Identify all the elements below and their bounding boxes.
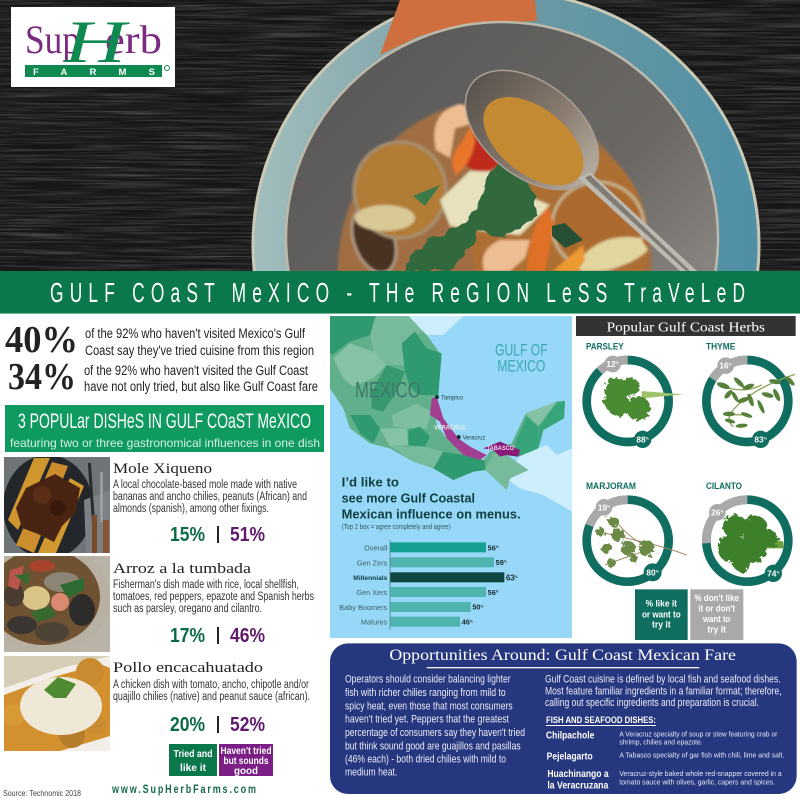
stat: 40%	[5, 319, 314, 361]
logo: SupHerb Farms: erb	[105, 17, 162, 62]
legend: haven't tried but sounds good: but sounds	[224, 756, 269, 767]
chart heading: see more Gulf Coastal	[342, 491, 475, 506]
text: operators recommendation: percentage of consumers say they haven't tried	[345, 727, 525, 739]
dish: Mole Xiqueno: almonds (spanish), among other fixings.	[113, 503, 269, 515]
text: cuisine definition	[545, 673, 782, 709]
fish and seafood dishes list: Pejelagarto	[547, 751, 593, 762]
photo: arroz a la tumbada	[4, 556, 110, 652]
legend: haven't tried but sounds good: good	[234, 766, 258, 777]
donut: parsley: %	[646, 436, 650, 440]
logo: SupHerb Farms: Sup	[25, 17, 80, 62]
legend: like it or want to try it: or want to	[642, 609, 681, 619]
logo: SupHerb Farms: H	[63, 9, 131, 75]
hero photo: seafood soup on dark slate	[0, 0, 800, 271]
stat: 40%: Coast say they've tried cuisine from this region	[85, 343, 314, 358]
donut: cilantro: 26	[711, 507, 720, 517]
bar chart: agreement by generation: Gen Xers	[356, 588, 388, 597]
bar chart: agreement by generation: Matures	[361, 618, 388, 627]
chart heading: (Top 2 box = agree completely and agree)	[342, 524, 451, 531]
map label: Gulf of Mexico: MEXICO	[497, 357, 545, 376]
logo: SupHerb Farms: FARMS	[33, 67, 155, 78]
stat: 34%: of the 92% who haven't visited the Gulf Coast	[84, 363, 308, 378]
herbs heading: Popular Gulf Coast Herbs	[607, 320, 765, 335]
dish: Mole Xiqueno: 15%	[170, 523, 205, 546]
map: land outside Mexico	[407, 316, 572, 512]
dish: Arroz a la tumbada: tomatoes, red peppers, epazote and Spanish herbs	[113, 591, 314, 603]
bar chart: agreement by generation: %	[470, 619, 473, 623]
logo: SupHerb Farms	[11, 7, 175, 87]
stat: 34%: have not only tried, but also like Gulf Coast fare	[84, 379, 318, 394]
donut: cilantro: %	[720, 509, 724, 513]
fish and seafood dishes list: shrimp, chilies and epazote.	[619, 738, 703, 747]
map label: Veracruz state: VERACRUZ	[434, 424, 466, 431]
fish and seafood dishes list: FISH AND SEAFOOD DISHES:	[546, 715, 656, 725]
donut: parsley	[570, 341, 686, 459]
donut: thyme	[691, 341, 800, 458]
bar chart: agreement by generation: %	[496, 545, 499, 549]
donut: cilantro	[704, 481, 791, 584]
donut: cilantro: 74	[767, 568, 776, 578]
legend: don't like it or don't want to try it: it or don't	[698, 604, 735, 614]
dish: Pollo encacahuatado: 52%	[230, 713, 265, 736]
panel: opportunities	[330, 643, 797, 794]
chart heading: Mexican influence on menus.	[342, 506, 521, 521]
legend: don't like it or don't want to try it: want to	[702, 614, 731, 624]
donut: marjoram: MARJORAM	[586, 481, 636, 491]
bar chart: agreement by generation: 56	[488, 588, 496, 597]
dish: Pollo encacahuatado	[113, 660, 310, 736]
bar chart: agreement by generation: %	[480, 604, 483, 608]
dish: Mole Xiqueno: bananas and ancho chilies, peanuts (African) and	[113, 491, 307, 503]
donut: marjoram: 19	[598, 502, 607, 512]
text: operators recommendation: Operators should consider balancing lighter	[345, 674, 511, 686]
fish and seafood dishes list: A Veracruz specialty of soup or stew featuring crab or	[619, 729, 778, 738]
donut: thyme: %	[764, 436, 768, 440]
donut: marjoram: 80	[646, 567, 656, 577]
dish: Pollo encacahuatado: 20%	[170, 713, 205, 736]
dish: Mole Xiqueno: Mole Xiqueno	[113, 461, 212, 477]
dish: Pollo encacahuatado: Pollo encacahuatado	[113, 660, 263, 676]
photo: pollo encacahuatado	[3, 656, 110, 751]
website: www.SupHerbFarms.com	[111, 783, 256, 796]
chart heading: I’d like to	[342, 475, 399, 490]
stat: 40%: 40%	[5, 319, 78, 361]
bar chart: agreement by generation: Overall	[364, 543, 388, 552]
opportunities heading: Opportunities Around: Gulf Coast Mexican Fare	[389, 647, 736, 664]
bar chart: agreement by generation: 56	[488, 543, 496, 552]
source note: Source: Technomic 2018	[3, 789, 81, 798]
bar chart: agreement by generation: %	[515, 575, 518, 579]
donut: marjoram: %	[607, 504, 611, 508]
bar chart: agreement by generation: 46	[462, 618, 470, 627]
bar chart: agreement by generation: Millennials	[353, 575, 388, 582]
dish: Arroz a la tumbada	[113, 561, 314, 647]
bar chart: agreement by generation	[339, 540, 518, 630]
title banner	[0, 271, 800, 314]
dish: Pollo encacahuatado: A chicken dish with tomato, ancho, chipotle and/or	[113, 679, 309, 691]
donut: thyme: 83	[754, 434, 764, 444]
donut: thyme: THYME	[706, 341, 735, 351]
chart heading	[342, 475, 521, 531]
text: operators recommendation: spicy heat, even those that most consumers	[345, 700, 513, 712]
map marker: Veracruz: Veracruz	[463, 434, 485, 441]
bar chart: agreement by generation: 59	[496, 558, 504, 567]
legend: tried and like it	[169, 744, 217, 776]
photo: mole enchiladas	[3, 455, 110, 559]
legend: haven't tried but sounds good: Haven't tried	[220, 746, 272, 757]
dish: Mole Xiqueno: 51%	[230, 523, 265, 546]
herbs heading	[576, 316, 796, 336]
stat: 40%: of the 92% who haven't visited Mexico's Gulf	[85, 326, 305, 341]
map label: Gulf of Mexico	[496, 344, 548, 372]
dish: Arroz a la tumbada: such as parsley, oregano and cilantro.	[113, 603, 262, 615]
panel: map and menu influence chart	[330, 316, 572, 638]
dish: Mole Xiqueno: A local chocolate-based mole made with native	[113, 479, 297, 491]
donut: cilantro: %	[776, 570, 780, 574]
fish and seafood dishes list: Veracruz-style baked whole red-snapper covered in a	[619, 769, 782, 778]
legend: don't like it or don't want to try it	[690, 589, 743, 640]
text: operators recommendation: fish with richer chilies ranging from mild to	[345, 687, 506, 699]
legend: like it or want to try it: % like it	[646, 599, 677, 609]
map label: Gulf of Mexico: GULF OF	[495, 341, 548, 360]
fish and seafood dishes list: la Veracruzana	[547, 780, 609, 791]
legend: don't like it or don't want to try it: % don't like	[694, 593, 739, 603]
legend: haven't tried but sounds good	[219, 744, 273, 777]
fish and seafood dishes list: A Tabasco specialty of gar fish with chili, lime and salt.	[619, 751, 784, 760]
fish and seafood dishes list: tomato sauce with olives, garlic, capers and spices.	[619, 777, 775, 786]
fish and seafood dishes list	[546, 715, 784, 791]
dish: Arroz a la tumbada: 17%	[170, 624, 205, 647]
bar chart: agreement by generation: 63	[506, 573, 515, 582]
legend: don't like it or don't want to try it: try it	[707, 624, 726, 634]
stat: 34%: 34%	[8, 356, 76, 398]
panel: popular herbs	[570, 316, 800, 640]
bar chart: agreement by generation: Baby Boomers	[339, 603, 388, 612]
heading: 3 popular dishes: featuring two or three gastronomical influences in one dish	[10, 436, 320, 450]
text: operators recommendation: medium heat.	[345, 766, 397, 778]
donut: parsley: 12	[606, 359, 616, 369]
text: operators recommendation	[345, 674, 525, 778]
text: operators recommendation: haven't tried yet. Peppers that the greatest	[345, 714, 509, 726]
dish: Pollo encacahuatado: quajillo chilies (native) and peanut sauce (african).	[113, 691, 310, 703]
legend: tried and like it: Tried and	[174, 748, 212, 760]
legend: like it or want to try it	[635, 589, 688, 640]
donut: thyme: 16	[719, 361, 729, 371]
text: operators recommendation: (46% each) - both dried chilies with mild to	[345, 754, 506, 766]
dish: Arroz a la tumbada: Arroz a la tumbada	[113, 561, 251, 577]
map marker: Veracruz	[456, 435, 486, 440]
dish: Mole Xiqueno	[113, 461, 307, 546]
bar chart: agreement by generation: %	[496, 590, 499, 594]
title banner: GULF COaST MeXICO - THe ReGION LeSS TraVeLeD	[50, 277, 745, 308]
map marker: Tampico: Tampico	[441, 394, 463, 401]
fish and seafood dishes list: Chilpachole	[546, 730, 595, 741]
bar chart: agreement by generation: 50	[472, 603, 480, 612]
map label: Tabasco state: TABASCO	[487, 446, 514, 452]
stat: 34%	[8, 356, 318, 398]
legend: like it or want to try it: try it	[652, 620, 671, 630]
donut: parsley: PARSLEY	[586, 341, 624, 351]
donut: cilantro: CILANTO	[706, 481, 742, 491]
donut: thyme: %	[729, 363, 733, 367]
map marker: Tampico	[435, 395, 463, 401]
legend: tried and like it: like it	[180, 762, 206, 774]
bar chart: agreement by generation: Gen Zers	[357, 558, 388, 567]
heading: 3 popular dishes: 3 POPULar DISHeS IN GULF COaST MeXICO	[18, 410, 311, 433]
map: Veracruz highlight	[430, 397, 487, 460]
dish: Arroz a la tumbada: Fisherman's dish made with rice, local shellfish,	[113, 579, 299, 591]
donut: marjoram	[574, 481, 687, 594]
donut: marjoram: %	[656, 569, 660, 573]
fish and seafood dishes list: Huachinango a	[547, 769, 609, 780]
map label: Mexico: MEXICO	[355, 378, 421, 403]
donut: parsley: %	[616, 361, 620, 365]
map: Tabasco highlight	[483, 442, 520, 457]
dish: Arroz a la tumbada: 46%	[230, 624, 265, 647]
text: operators recommendation: but think sound good are guajillos and pasillas	[345, 740, 521, 752]
donut: parsley: 88	[636, 434, 646, 444]
map: Mexico states	[330, 316, 565, 490]
heading: 3 popular dishes	[5, 405, 324, 452]
bar chart: agreement by generation: %	[504, 560, 507, 564]
